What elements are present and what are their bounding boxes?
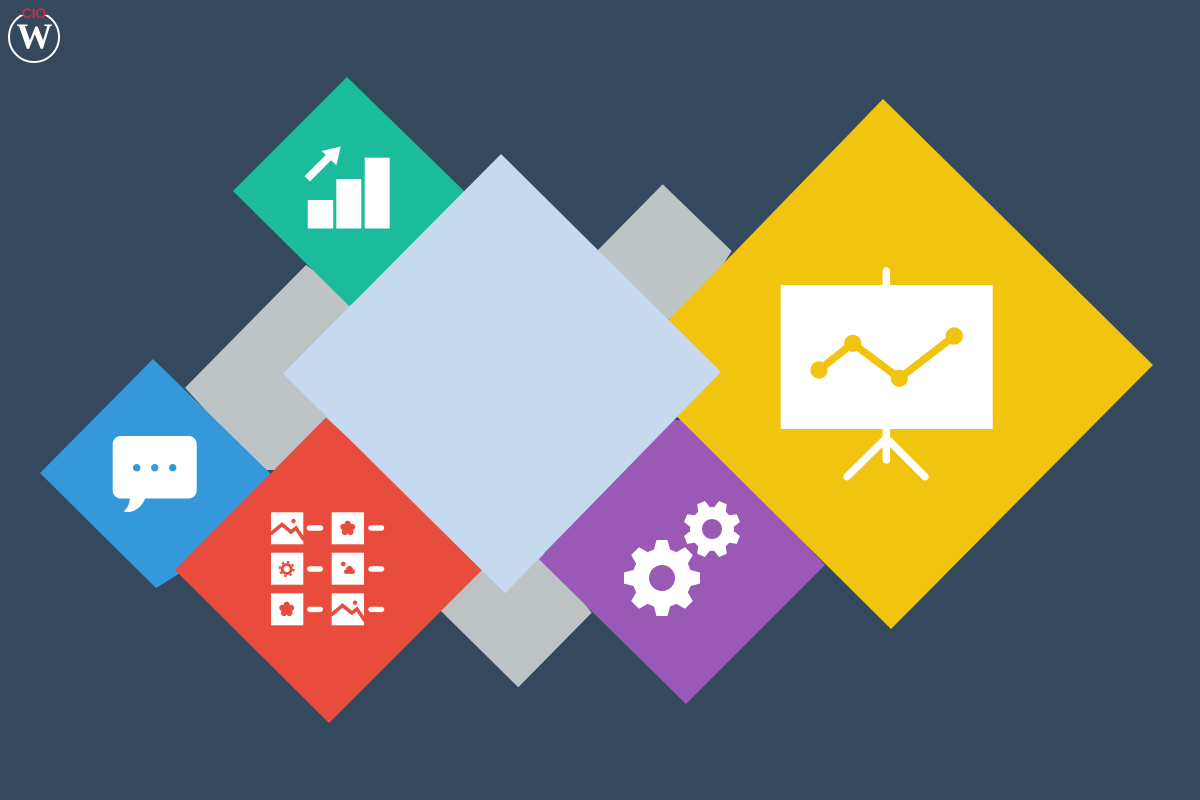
icon: rising bar chart (307, 146, 390, 228)
panel: yellow diamond with presentation icon (625, 99, 1153, 629)
panel: red diamond with image list icon (175, 418, 486, 723)
panel: blue diamond with speech icon (40, 359, 275, 588)
panel: central light blue diamond (283, 154, 721, 593)
icon: small gear (683, 500, 741, 558)
icon: speech bubble (113, 436, 197, 512)
panel: purple diamond with gears icon (539, 420, 825, 704)
panel: grey band at top right (590, 184, 732, 325)
logo: CIO W (9, 6, 59, 62)
line chart on board (810, 327, 963, 387)
icon: large gear (624, 540, 700, 616)
logo text: W: W (16, 16, 52, 56)
logo text: CIO: CIO (22, 6, 46, 21)
panel: grey band from left to bottom (185, 265, 592, 687)
panel: green diamond with growth icon (233, 77, 466, 306)
icon: image list grid (270, 512, 384, 625)
icon: presentation board (781, 271, 993, 477)
